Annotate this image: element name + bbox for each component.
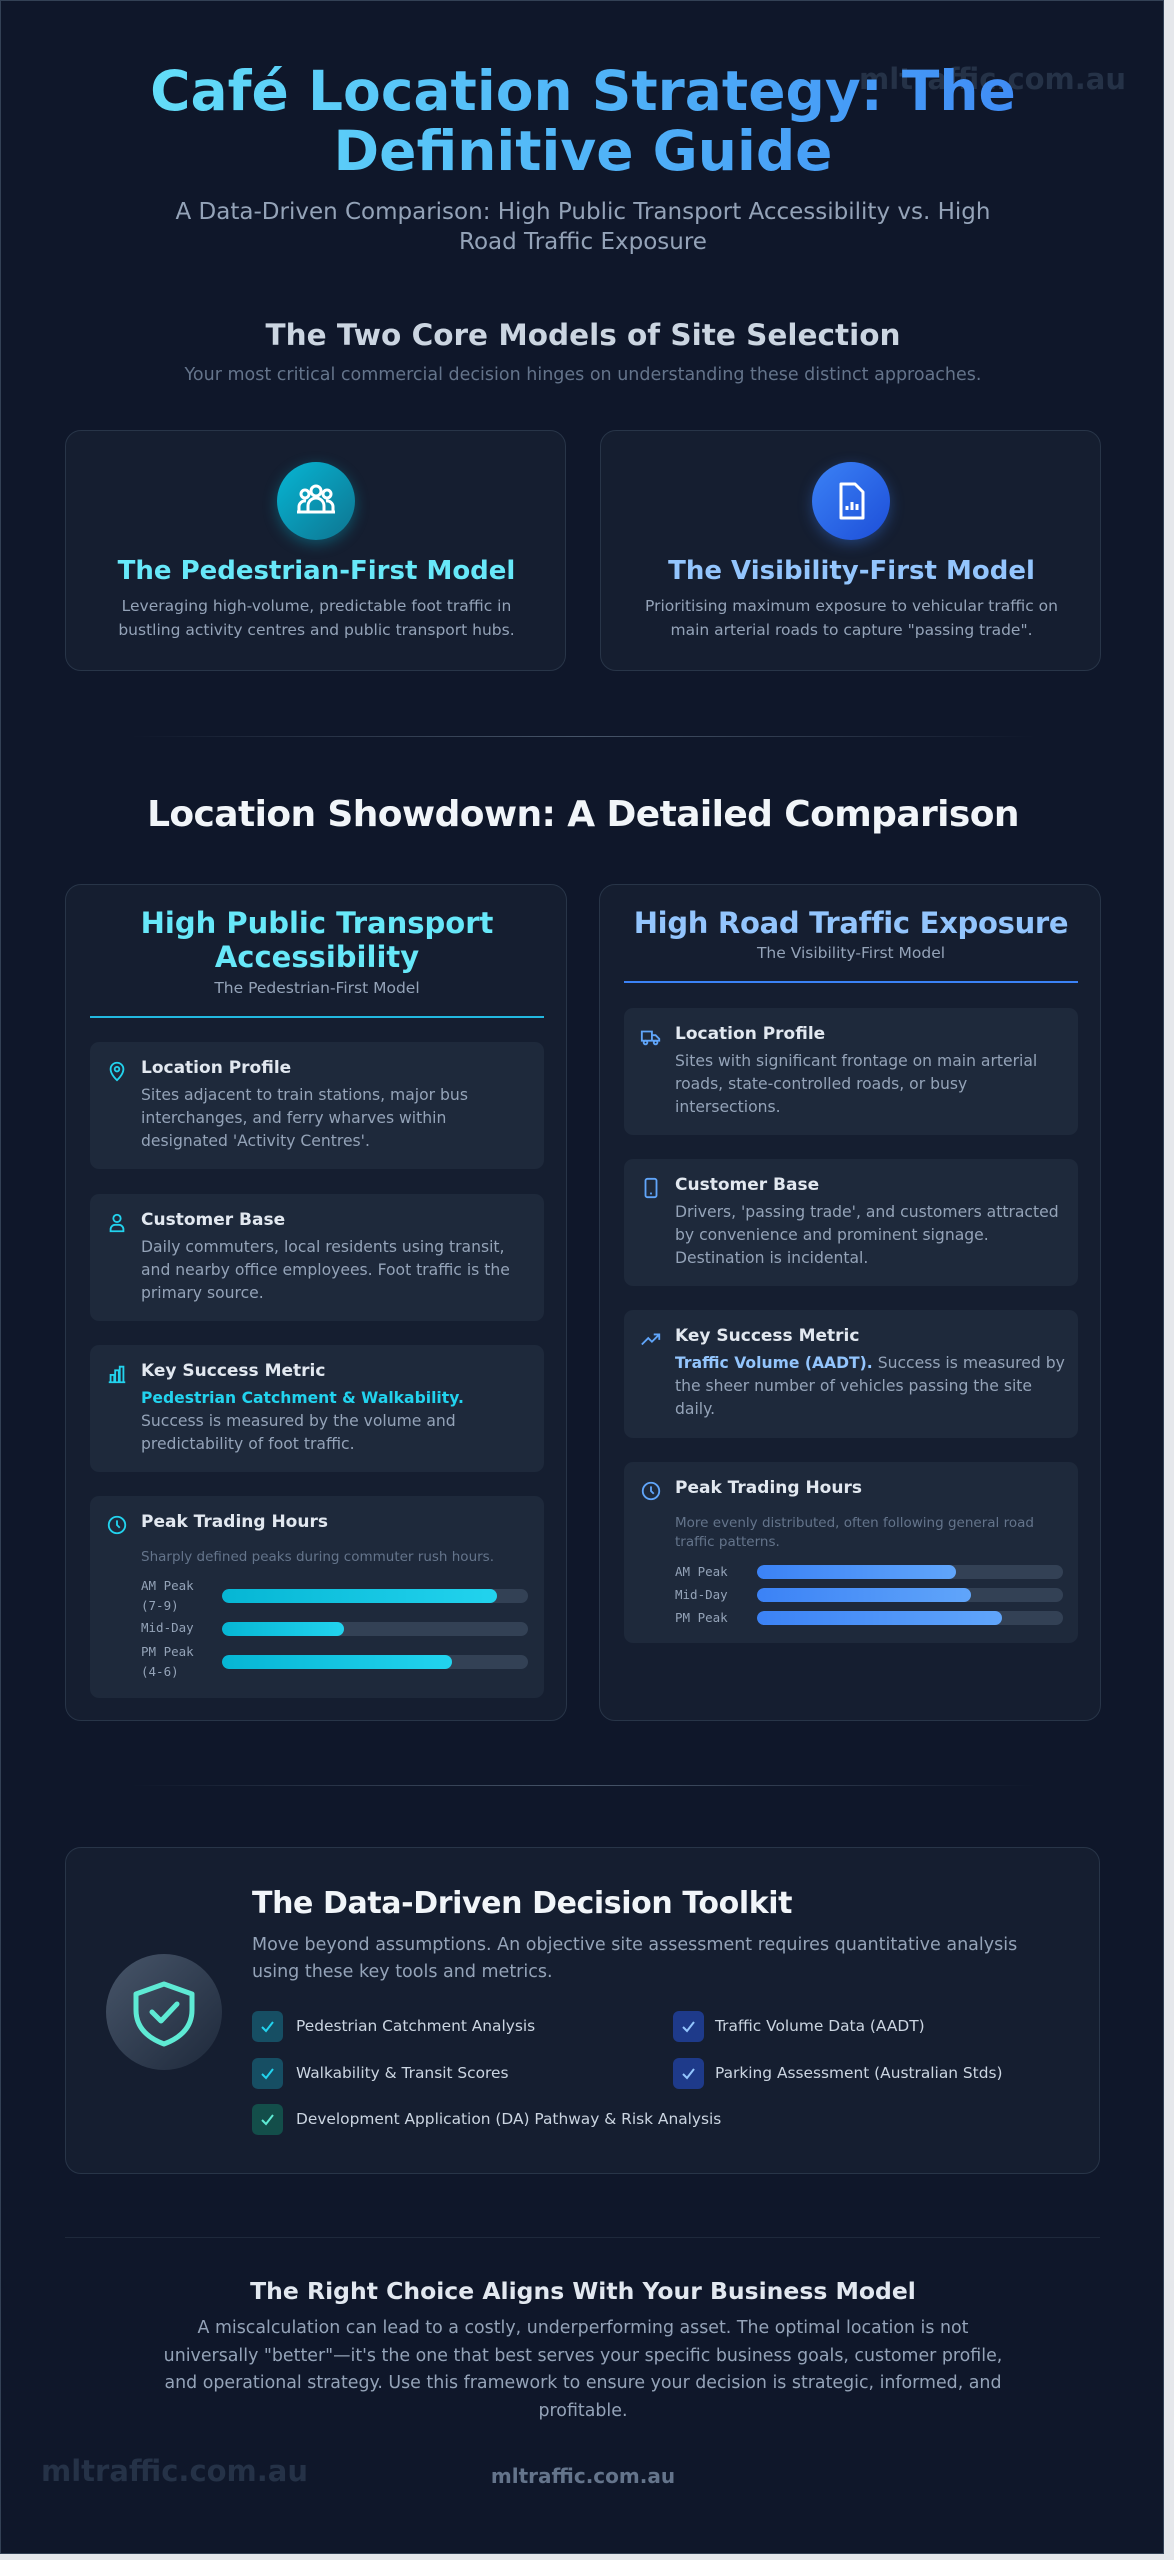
- item: customer base: [624, 1159, 1078, 1286]
- item: key success metric: [624, 1310, 1078, 1438]
- subtitle: A Data-Driven Comparison: High Public Transport Accessibility vs. High: [176, 199, 990, 225]
- item: key success metric: predictability of foot traffic.: [141, 1435, 355, 1453]
- title: Definitive Guide: [333, 119, 832, 183]
- item: location profile: Location Profile: [141, 1058, 291, 1078]
- item: location profile: interchanges, and ferry wharves within: [141, 1109, 446, 1127]
- item: customer base: by convenience and prominent signage.: [675, 1226, 989, 1244]
- checklist: Walkability & Transit Scores: [296, 2064, 509, 2082]
- bar chart: pedestrian peaks: [141, 1578, 528, 1679]
- toolkit heading: The Data-Driven Decision Toolkit: [252, 1886, 792, 1921]
- item: customer base: primary source.: [141, 1284, 264, 1302]
- icon: bar chart: [108, 1366, 126, 1384]
- bar chart: pedestrian peaks: Mid-Day: [141, 1620, 194, 1635]
- watermark top: mltraffic.com.au: [859, 62, 1126, 96]
- heading: showdown: Location Showdown: A Detailed Comparison: [147, 794, 1019, 835]
- item: location profile: designated 'Activity Centres'.: [141, 1132, 370, 1150]
- item: customer base: Destination is incidental.: [675, 1249, 868, 1267]
- panel: high public transport: [65, 884, 567, 1721]
- column subtitle: The Visibility-First Model: [757, 944, 945, 962]
- bar chart: road peaks: [675, 1564, 1063, 1625]
- item: key success metric: Traffic Volume (AADT). Success is measured by: [675, 1354, 1065, 1372]
- item: location profile: roads, state-controlled roads, or busy: [675, 1075, 967, 1093]
- toolkit text: [252, 1935, 1017, 1982]
- item: key success metric: Success is measured by the volume and: [141, 1412, 456, 1430]
- item: customer base: Daily commuters, local residents using transit,: [141, 1238, 504, 1256]
- bar chart: road peaks: AM Peak: [675, 1564, 728, 1579]
- column title: Accessibility: [215, 940, 419, 974]
- checklist: Pedestrian Catchment Analysis: [296, 2017, 535, 2035]
- card title: The Visibility-First Model: [668, 556, 1035, 586]
- icon: phone: [644, 1178, 658, 1198]
- item: location profile: Sites with significant frontage on main arterial: [675, 1052, 1037, 1070]
- item: key success metric: the sheer number of vehicles passing the site: [675, 1377, 1032, 1395]
- item: key success metric: Key Success Metric: [141, 1361, 325, 1381]
- bar chart: road peaks: Mid-Day: [675, 1587, 728, 1602]
- card text: Prioritising maximum exposure to vehicular traffic on: [645, 597, 1058, 615]
- item: peak trading hours: traffic patterns.: [675, 1534, 780, 1550]
- item: peak trading hours: [90, 1496, 544, 1698]
- icon: clock: [642, 1482, 660, 1500]
- toolkit text: using these key tools and metrics.: [252, 1962, 553, 1982]
- icon: document chart: [812, 462, 890, 540]
- card text: [645, 597, 1058, 639]
- checklist: Parking Assessment (Australian Stds): [715, 2064, 1002, 2082]
- heading: two core models: The Two Core Models of Site Selection: [266, 318, 900, 352]
- checklist: Traffic Volume Data (AADT): [715, 2017, 925, 2035]
- item: peak trading hours: Peak Trading Hours: [675, 1478, 862, 1498]
- heading: conclusion: The Right Choice Aligns With Your Business Model: [250, 2277, 916, 2305]
- item: customer base: Customer Base: [141, 1210, 285, 1230]
- conclusion text: A miscalculation can lead to a costly, underperforming asset. The optimal location is not: [198, 2318, 968, 2338]
- conclusion text: profitable.: [538, 2400, 627, 2420]
- panel: visibility-first model: [600, 430, 1101, 671]
- bar chart: pedestrian peaks: (7-9): [141, 1598, 179, 1613]
- column title: High Road Traffic Exposure: [634, 906, 1068, 940]
- item: customer base: [90, 1194, 544, 1321]
- bar chart: road peaks: PM Peak: [675, 1610, 728, 1625]
- icon: people: [277, 462, 355, 540]
- item: peak trading hours: Sharply defined peaks during commuter rush hours.: [141, 1549, 494, 1565]
- conclusion text: universally "better"—it's the one that best serves your specific business goals, customer profile,: [164, 2346, 1002, 2366]
- checklist: [252, 2011, 1002, 2135]
- icon: trend: [641, 1334, 660, 1345]
- title: [41, 61, 1125, 181]
- item: peak trading hours: More evenly distributed, often following general road: [675, 1515, 1034, 1531]
- watermark bottom left: mltraffic.com.au: [41, 2454, 308, 2488]
- item: key success metric: [90, 1345, 544, 1472]
- panel: pedestrian-first model: [65, 430, 566, 671]
- footer brand: mltraffic.com.au: [491, 2464, 675, 2488]
- subtitle: [176, 199, 990, 255]
- item: location profile: intersections.: [675, 1098, 781, 1116]
- item: key success metric: Pedestrian Catchment & Walkability.: [141, 1389, 464, 1407]
- icon: truck: [640, 1030, 660, 1046]
- item: location profile: Location Profile: [675, 1024, 825, 1044]
- panel: high road traffic: [599, 884, 1101, 1721]
- item: customer base: Customer Base: [675, 1175, 819, 1195]
- bar chart: pedestrian peaks: (4-6): [141, 1664, 179, 1679]
- item: peak trading hours: [624, 1462, 1078, 1643]
- icon: clock: [108, 1516, 126, 1534]
- card text: [118, 597, 515, 639]
- item: key success metric: Key Success Metric: [675, 1326, 859, 1346]
- toolkit text: Move beyond assumptions. An objective site assessment requires quantitative analysis: [252, 1935, 1017, 1955]
- item: key success metric: daily.: [675, 1400, 715, 1418]
- column title: High Public Transport: [141, 906, 493, 940]
- icon: user: [110, 1214, 124, 1232]
- item: location profile: Sites adjacent to train stations, major bus: [141, 1086, 468, 1104]
- column subtitle: The Pedestrian-First Model: [214, 979, 420, 997]
- item: customer base: Drivers, 'passing trade', and customers attracted: [675, 1203, 1059, 1221]
- item: customer base: and nearby office employees. Foot traffic is the: [141, 1261, 510, 1279]
- title: Café Location Strategy: The: [150, 59, 1016, 123]
- icon: shield: [106, 1954, 222, 2070]
- card text: Leveraging high-volume, predictable foot traffic in: [122, 597, 511, 615]
- bar chart: pedestrian peaks: AM Peak: [141, 1578, 194, 1593]
- subtitle: Road Traffic Exposure: [459, 229, 707, 255]
- card text: bustling activity centres and public transport hubs.: [118, 621, 515, 639]
- section subtitle: Your most critical commercial decision hinges on understanding these distinct approaches.: [185, 365, 981, 385]
- conclusion text: and operational strategy. Use this framework to ensure your decision is strategic, informed, and: [164, 2373, 1001, 2393]
- icon: pin: [110, 1062, 124, 1082]
- item: location profile: [90, 1042, 544, 1169]
- conclusion text: [164, 2318, 1002, 2420]
- checklist: Development Application (DA) Pathway & Risk Analysis: [296, 2110, 721, 2128]
- item: location profile: [624, 1008, 1078, 1135]
- card title: The Pedestrian-First Model: [118, 556, 515, 586]
- item: peak trading hours: Peak Trading Hours: [141, 1512, 328, 1532]
- card text: main arterial roads to capture "passing trade".: [670, 621, 1033, 639]
- column title: [141, 906, 493, 974]
- bar chart: pedestrian peaks: PM Peak: [141, 1644, 194, 1659]
- panel: decision toolkit: [65, 1847, 1100, 2174]
